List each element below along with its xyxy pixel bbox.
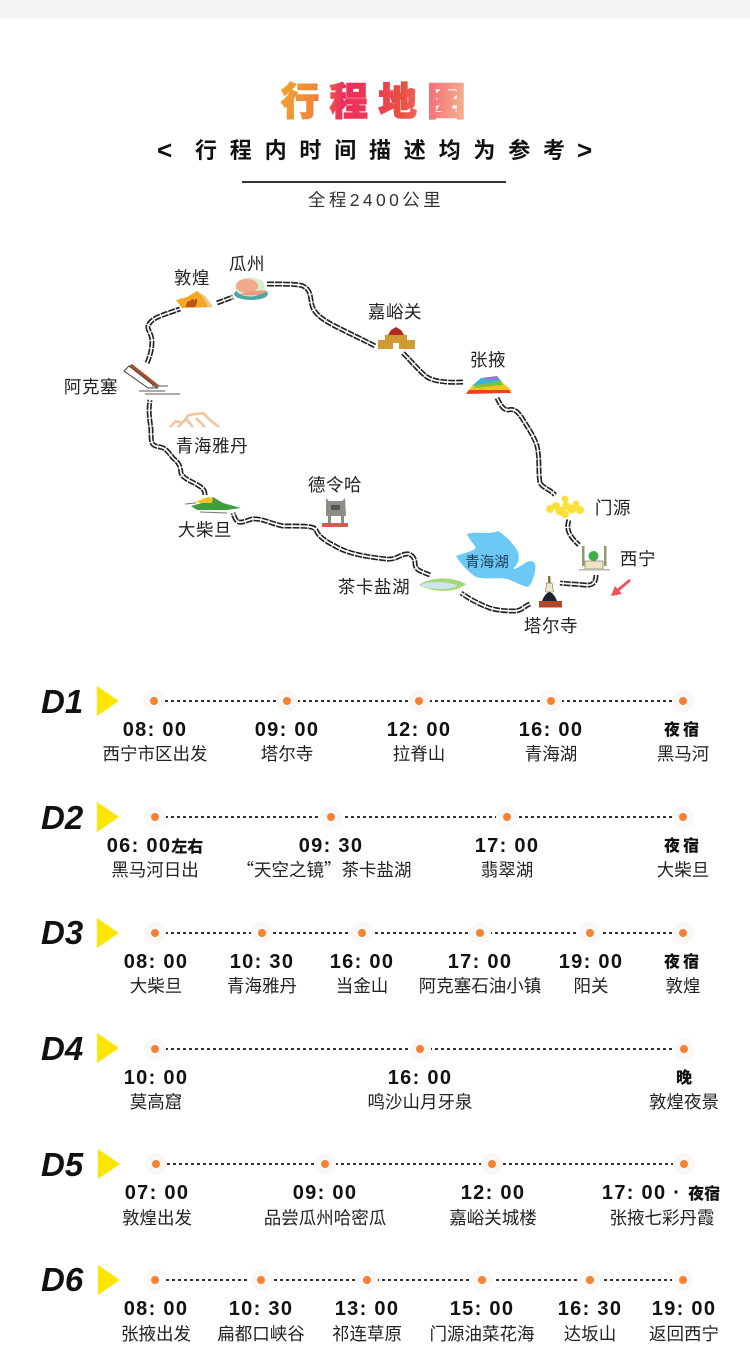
D4 stops: 10: 00 [124, 1067, 188, 1089]
place labels: 门源 [595, 498, 631, 518]
icon: Dunhuang dune [176, 291, 213, 308]
D6 stops: 祁连草原 [332, 1324, 402, 1344]
place labels: 张掖 [470, 350, 506, 370]
D1 stops: 16: 00 [519, 719, 583, 741]
D4 stops: 晚 [676, 1068, 692, 1087]
D1 stops: 青海湖 [525, 744, 577, 764]
place labels: 大柴旦 [178, 520, 232, 540]
D1 stops: 夜宿 [664, 720, 702, 739]
day 5 timeline [41, 1146, 720, 1228]
D2 stops: 夜宿 [664, 836, 702, 855]
place labels: 阿克塞 [64, 377, 118, 397]
D3 stops: 夜宿 [664, 952, 702, 971]
icon: Menyuan rapeseed flowers [546, 496, 584, 518]
total distance: 全程2400公里 [308, 190, 444, 210]
D5 stops: 09: 00 [293, 1182, 357, 1204]
icon: Aksai slide [124, 364, 180, 394]
D1 marker [97, 686, 119, 716]
D6 stops: 16: 30 [558, 1298, 622, 1320]
D1 heading: D1 [41, 683, 83, 720]
icon: Qinghai Yardang [170, 413, 219, 427]
D1 stops [102, 719, 709, 764]
D1 stops: 拉脊山 [393, 744, 445, 764]
D5 stops: 张掖七彩丹霞 [610, 1208, 714, 1228]
icon: Guazhou melon [234, 278, 268, 300]
subtitle: 行程内时间描述均为参考 [195, 138, 578, 163]
day 1 timeline [41, 683, 709, 764]
D6 stops: 张掖出发 [121, 1324, 191, 1344]
place labels: 西宁 [620, 549, 656, 569]
D3 stops: 16: 00 [330, 951, 394, 973]
place labels: 德令哈 [308, 475, 362, 495]
D5 line [145, 1153, 695, 1175]
D1 stops: 12: 00 [387, 719, 451, 741]
D3 stops: 当金山 [336, 976, 388, 996]
D6 stops: 10: 30 [229, 1298, 293, 1320]
place labels: 青海雅丹 [176, 436, 248, 456]
place labels: 茶卡盐湖 [338, 577, 410, 597]
D6 stops: 达坂山 [564, 1324, 616, 1344]
D2 stops: “天空之镜”茶卡盐湖 [236, 857, 412, 882]
D1 line [143, 690, 694, 712]
top grey band [0, 0, 750, 19]
D6 stops: 扁都口峡谷 [217, 1324, 305, 1344]
D3 stops: 17: 00 [448, 951, 512, 973]
icon: Dachaidan hill [185, 497, 241, 513]
icon: Jiayuguan fort [378, 327, 415, 349]
D6 stops: 门源油菜花海 [430, 1324, 534, 1344]
title: 行程地图 [281, 82, 476, 124]
place labels: 嘉峪关 [368, 302, 422, 322]
icon: Xining mosque [579, 546, 610, 570]
icon: Chaka salt lake [419, 578, 466, 591]
D3 stops: 敦煌 [666, 976, 700, 996]
railway route [147, 284, 596, 611]
D5 stops: 17: 00 · 夜宿 [602, 1182, 720, 1204]
D3 marker [97, 918, 119, 948]
day 4 timeline [41, 1030, 719, 1112]
D4 stops: 敦煌夜景 [649, 1092, 719, 1112]
D5 marker [98, 1149, 120, 1179]
D5 stops [122, 1182, 720, 1228]
D5 heading: D5 [41, 1146, 84, 1183]
route map [64, 254, 656, 636]
D4 stops: 莫高窟 [130, 1092, 182, 1112]
D3 heading: D3 [41, 914, 83, 951]
day 3 timeline [41, 914, 702, 996]
D5 stops: 嘉峪关城楼 [449, 1208, 537, 1228]
D4 stops: 鸣沙山月牙泉 [368, 1092, 472, 1112]
D1 stops: 塔尔寺 [261, 744, 313, 764]
D3 stops: 阿克塞石油小镇 [419, 976, 541, 996]
D6 marker [98, 1265, 120, 1295]
D2 line [144, 806, 694, 828]
D6 stops: 08: 00 [124, 1298, 188, 1320]
D6 heading: D6 [41, 1261, 84, 1298]
D4 stops [124, 1067, 719, 1112]
D3 stops: 青海雅丹 [227, 976, 297, 996]
D4 stops: 16: 00 [388, 1067, 452, 1089]
icon: red arrow [611, 580, 630, 596]
D3 stops: 19: 00 [559, 951, 623, 973]
D4 marker [97, 1033, 119, 1063]
D2 stops: 大柴旦 [657, 860, 709, 880]
D3 stops [124, 951, 702, 996]
D1 stops: 09: 00 [255, 719, 319, 741]
D5 stops: 07: 00 [125, 1182, 189, 1204]
lake: Qinghai Lake [456, 531, 536, 587]
D2 stops: 翡翠湖 [481, 860, 533, 880]
place labels: 塔尔寺 [524, 616, 578, 636]
D4 line [144, 1038, 695, 1060]
place labels [64, 254, 656, 636]
D1 stops: 西宁市区出发 [102, 744, 208, 764]
D2 marker [97, 802, 119, 832]
D2 stops: 黑马河日出 [111, 860, 199, 880]
D1 stops: 08: 00 [123, 719, 187, 741]
day 6 timeline [41, 1261, 719, 1344]
D6 line [144, 1269, 694, 1291]
D5 stops: 12: 00 [461, 1182, 525, 1204]
D6 stops: 15: 00 [450, 1298, 514, 1320]
D2 stops [107, 835, 709, 882]
icon: Zhangye rainbow mountain [466, 376, 511, 394]
D6 stops [121, 1298, 719, 1344]
D3 stops: 阳关 [574, 976, 608, 996]
D3 stops: 10: 30 [230, 951, 294, 973]
subtitle: > [577, 135, 592, 165]
D4 heading: D4 [41, 1030, 83, 1067]
place labels: 敦煌 [174, 268, 210, 288]
D3 stops: 08: 00 [124, 951, 188, 973]
D6 stops: 返回西宁 [649, 1324, 719, 1344]
D2 heading: D2 [41, 799, 84, 836]
D6 stops: 19: 00 [652, 1298, 716, 1320]
D1 stops: 黑马河 [657, 744, 709, 764]
D2 stops: 17: 00 [475, 835, 539, 857]
D2 stops: 09: 30 [299, 835, 363, 857]
D3 line [144, 922, 694, 944]
D6 stops: 13: 00 [335, 1298, 399, 1320]
place labels: 瓜州 [229, 254, 265, 274]
D5 stops: 敦煌出发 [122, 1208, 192, 1228]
D3 stops: 大柴旦 [130, 976, 182, 996]
D2 stops: 06: 00左右 [107, 835, 203, 857]
subtitle: < [157, 135, 172, 165]
day 2 timeline [41, 799, 709, 882]
icon: Delingha monument [322, 498, 348, 527]
lake: Qinghai Lake: 青海湖 [465, 554, 509, 571]
D5 stops: 品尝瓜州哈密瓜 [264, 1208, 386, 1228]
icon: Ta'er Temple stupa [539, 576, 562, 608]
